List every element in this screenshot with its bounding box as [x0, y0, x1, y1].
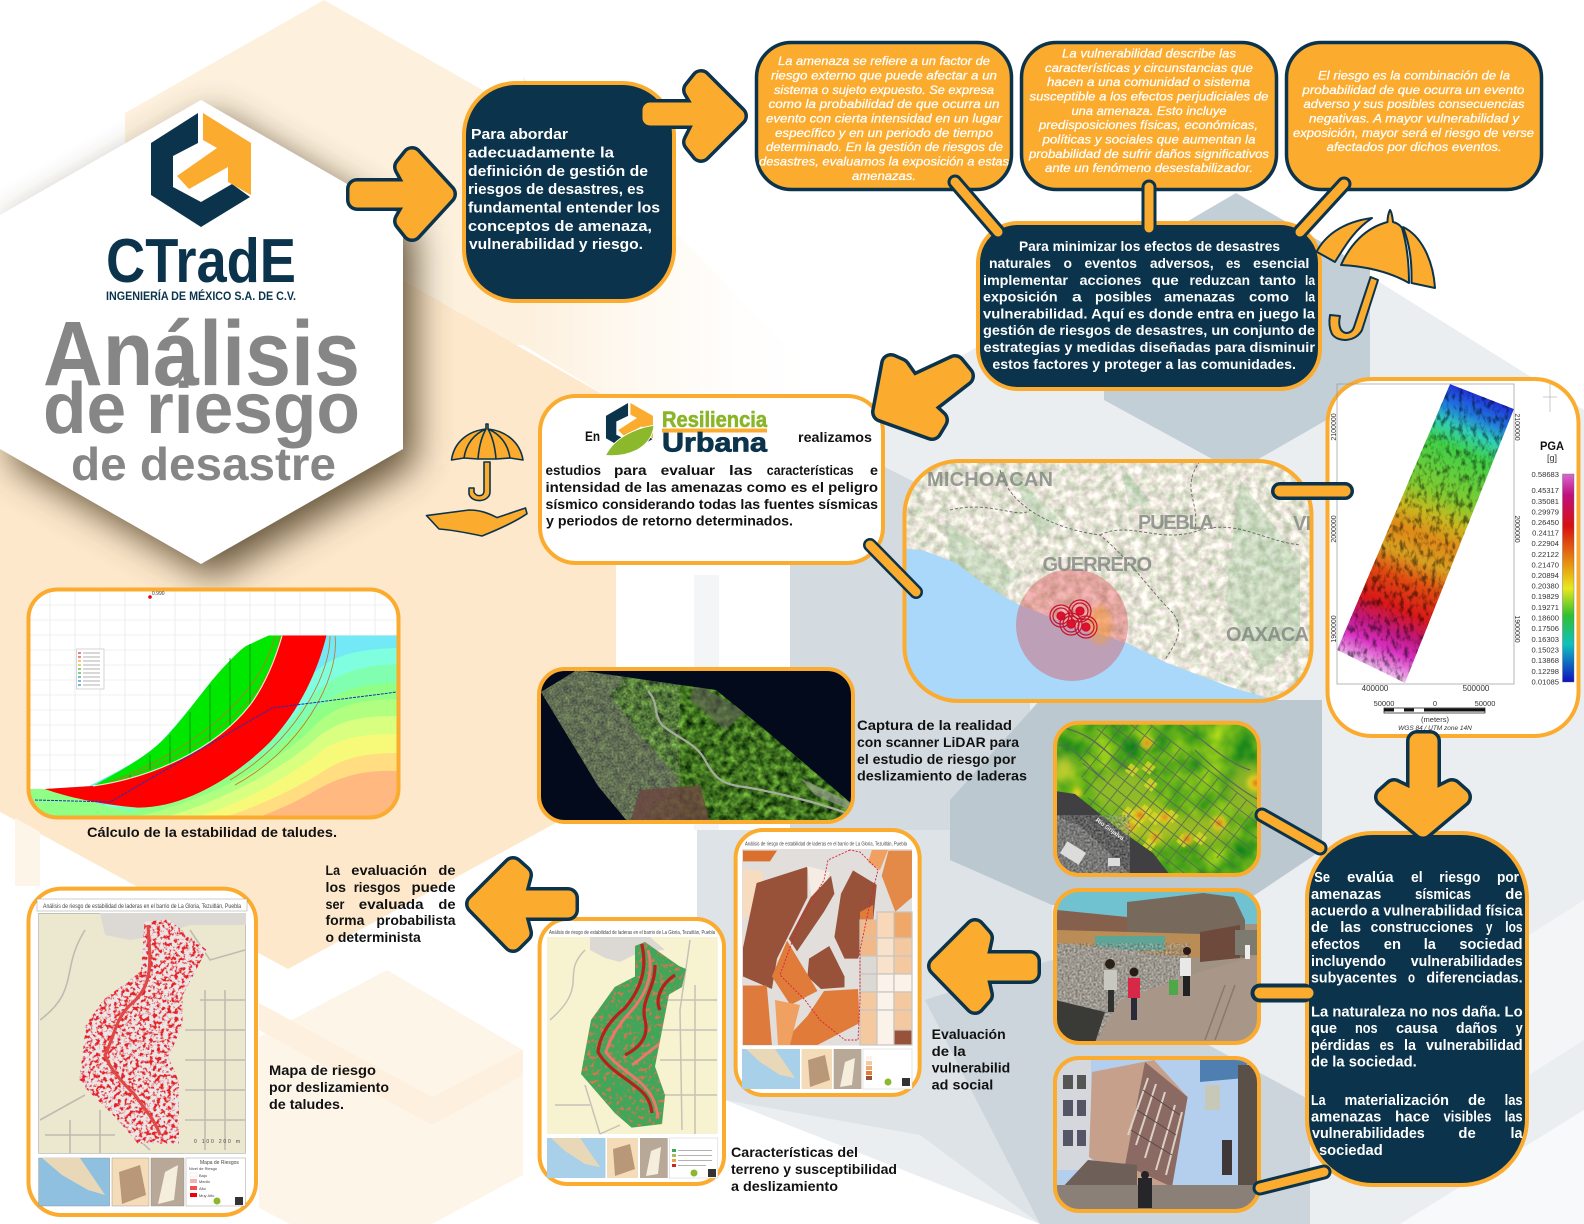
- map title: Análisis de riesgo de estabilidad de laderas en el barrio de La Gloria, Tezuitlán, Puebla: [745, 842, 907, 848]
- panel: gestión de riesgos: naturales: [989, 255, 1051, 271]
- minimaps: [547, 1138, 668, 1178]
- axis labels: 2100000: [1513, 413, 1520, 441]
- panel: vulnerabilidad: ante un fenómeno desestabilizador.: [1045, 161, 1253, 175]
- title: de riesgo: [43, 369, 360, 449]
- legend values: 0.26450: [1532, 518, 1559, 527]
- caption: Características: terreno y susceptibilidad: [731, 1161, 897, 1177]
- panel: evaluación física y social: la: [1424, 936, 1436, 953]
- logo wordmark: CTradE: [106, 227, 296, 296]
- panel: evaluación física y social: amenazas: [1311, 1108, 1381, 1126]
- connector: edificio a evaluación: [1260, 1172, 1324, 1188]
- text: evaluación de riesgos: puede: [412, 879, 456, 895]
- text: estudios: e: [870, 462, 878, 478]
- photo: edificio colapsado: [1055, 1058, 1259, 1211]
- panel: gestión de riesgos: la: [1305, 288, 1315, 304]
- arrow: introducción a conceptos: [650, 80, 737, 152]
- panel: mapa de riesgo: [28, 889, 256, 1215]
- panel: evaluación física y social: vulnerabilidades: [1312, 1125, 1425, 1142]
- panel: evaluación física y social: amenazas: [1311, 886, 1381, 903]
- chart frame: [1337, 384, 1514, 684]
- map title: Análisis de riesgo de estabilidad de laderas en el barrio de La Gloria, Tezuitlán, Puebla: [549, 930, 715, 936]
- caption: mapa de riesgo: de taludes.: [269, 1096, 344, 1112]
- legend values: 0.17506: [1532, 624, 1559, 633]
- map: state labels: PUEBLA: [1138, 512, 1214, 534]
- text: estudios: y periodos de retorno determinados.: [546, 512, 793, 528]
- white hexagon with shadow: [0, 100, 415, 578]
- photo: escombros: [1055, 890, 1259, 1043]
- caption: LiDAR: deslizamiento de laderas: [857, 768, 1027, 784]
- panel: gestión de riesgos: tanto: [1260, 272, 1296, 288]
- panel: vulnerabilidad: La vulnerabilidad describe las: [1062, 46, 1236, 60]
- caption: Características: [731, 1144, 897, 1194]
- marker: factor de seguridad: 0.990: [152, 591, 165, 597]
- photo: LiDAR: [539, 669, 853, 822]
- panel: gestión de riesgos: implementar: [983, 272, 1069, 288]
- map legend: Bajo: [199, 1173, 208, 1178]
- panel: introducción: definición de gestión de: [468, 163, 648, 180]
- caption: LiDAR: el estudio de riesgo por: [857, 751, 1017, 767]
- panel: evaluación física y social: vulnerabilidades: [1411, 953, 1523, 970]
- panel: introducción: [464, 83, 674, 301]
- panel: riesgo: afectados por dichos eventos.: [1327, 140, 1502, 154]
- map legend: Muy Alto: [199, 1193, 215, 1198]
- icon: umbrella over hand: [426, 424, 527, 536]
- panel: evaluación física y social: las: [1505, 1108, 1523, 1126]
- panel: vulnerabilidad social map: [736, 830, 920, 1095]
- panel: gestión de riesgos: que: [1152, 272, 1179, 288]
- panel: evaluación física y social: y: [1486, 919, 1493, 936]
- legend values: 0.20380: [1532, 582, 1559, 590]
- text: evaluación de riesgos: o determinista: [326, 929, 421, 945]
- panel: gestión de riesgos: exposición: [983, 288, 1058, 304]
- legend values: 0.45317: [1532, 486, 1559, 495]
- axis labels: 1900000: [1513, 615, 1520, 643]
- panel: introducción: Para abordar: [471, 126, 568, 143]
- panel: evaluación física y social: sociedad: [1459, 936, 1523, 953]
- panel: gestión de riesgos: es: [1226, 255, 1241, 271]
- text: evaluación de riesgos: forma: [326, 912, 365, 928]
- text: realizamos: realizamos: [798, 429, 872, 445]
- arrow: a Resiliencia Urbana: [882, 364, 964, 430]
- scale bar: WGS 84 / UTM zone 14N: [1398, 725, 1472, 732]
- legend values: 0.12298: [1532, 667, 1559, 676]
- map: state labels: OAXACA: [1226, 624, 1309, 646]
- text: estudios: [546, 462, 878, 528]
- map: land: [904, 461, 1311, 701]
- map: state labels: MICHOACAN: [927, 469, 1053, 491]
- panel: evaluación física y social: acuerdo a vulnerabilidad física: [1311, 902, 1523, 920]
- panel: gestión de riesgos: eventos: [1084, 255, 1137, 271]
- map legend: Alto: [199, 1186, 207, 1191]
- river and city: [1055, 791, 1170, 875]
- text: estudios: para: [614, 462, 647, 478]
- text: estudios: intensidad de las amenazas como es el peligro: [546, 479, 878, 495]
- panel: evaluación física y social: sísmicas: [1415, 886, 1471, 903]
- panel: evaluación física y social: de la sociedad.: [1311, 1054, 1417, 1070]
- panel: vulnerabilidad: características y circunstancias que: [1045, 61, 1253, 75]
- panel: amenaza: evento con cierta intensidad en un lugar: [766, 112, 1003, 126]
- panel: evaluación física y social: pérdidas: [1311, 1037, 1370, 1054]
- map: state labels: [927, 469, 1319, 646]
- legend values: 0.19829: [1532, 592, 1559, 601]
- logo subtitle: INGENIERÍA DE MÉXICO S.A. DE C.V.: [106, 290, 296, 303]
- panel: evaluación física y social: por: [1497, 869, 1519, 886]
- legend values: 0.22904: [1532, 539, 1559, 548]
- panel: susceptibilidad map: [540, 919, 724, 1184]
- marker: factor de seguridad: [148, 591, 165, 599]
- map: state labels: VE: [1293, 513, 1319, 535]
- legend values: 0.58683: [1532, 470, 1559, 479]
- panel: evaluación física y social: Se: [1314, 869, 1330, 886]
- panel: riesgo: El riesgo es la combinación de la: [1318, 68, 1510, 82]
- panel: gestión de riesgos: reduzcan: [1190, 272, 1250, 288]
- legend values: 0.21470: [1532, 560, 1559, 570]
- axis labels: 400000: [1362, 684, 1389, 693]
- scale bar: 0: [1433, 699, 1437, 708]
- map legend: [186, 1158, 246, 1206]
- map: impact circle: [1016, 569, 1128, 681]
- panel: vulnerabilidad: hacen a una comunidad o sistema: [1047, 75, 1250, 89]
- legend values: 0.19271: [1532, 603, 1559, 612]
- panel: amenaza: amenazas.: [852, 169, 916, 183]
- panel: evaluación física y social: riesgo: [1439, 869, 1480, 886]
- map legend: Mapa de Riesgos: [200, 1160, 239, 1166]
- panel: evaluación física y social: causa: [1396, 1020, 1438, 1037]
- connector: Resiliencia a mapa: [870, 545, 916, 592]
- legend values: 0.22122: [1532, 550, 1559, 559]
- legend colour bar: [1562, 474, 1574, 682]
- legend values: [1532, 470, 1559, 686]
- axis labels: 2000000: [1513, 515, 1520, 543]
- panel: gestión de riesgos: estos factores y proteger a las comunidades.: [992, 356, 1296, 372]
- axis labels: 1900000: [1331, 615, 1338, 643]
- panel: vulnerabilidad: susceptible a los efectos perjudiciales de: [1030, 90, 1269, 104]
- panel: riesgo: negativas. A mayor vulnerabilidad y: [1309, 112, 1520, 126]
- map: borders: [950, 461, 1300, 660]
- legend values: 0.29979: [1532, 508, 1559, 516]
- panel: riesgo: probabilidad de que ocurra un evento: [1301, 83, 1525, 97]
- panel: gestión de riesgos: Para minimizar los efectos de desastres: [1019, 238, 1280, 254]
- panel: gestión de riesgos: acciones: [1080, 272, 1142, 288]
- arrow: a evaluación de riesgos: [476, 867, 568, 942]
- logo wordmark Resiliencia Urbana: Urbana: [662, 428, 768, 458]
- caption: estabilidad: Cálculo de la estabilidad de taludes.: [87, 824, 337, 840]
- legend title: [g]: [1547, 453, 1557, 463]
- panel: amenaza: como la probabilidad de que ocurra un: [768, 97, 1000, 111]
- text: estudios: evaluar: [661, 462, 716, 478]
- panel: evaluación física y social: la: [1510, 1125, 1523, 1142]
- map: pendientes: [547, 937, 718, 1134]
- chart: PGA strip: [1337, 384, 1514, 684]
- panel: introducción: fundamental entender los: [468, 200, 660, 216]
- panel: evaluación física y social: las: [1340, 919, 1361, 936]
- logo wordmark Resiliencia Urbana: Resiliencia: [662, 407, 768, 432]
- axis labels: 500000: [1463, 684, 1490, 693]
- arrow: PGA a evaluación: [1385, 741, 1461, 829]
- panel: evaluación física y social: evalúa: [1347, 869, 1394, 886]
- text: estudios: sísmico considerando todas las fuentes sísmicas: [546, 496, 878, 512]
- text: estudios: características: [767, 462, 854, 478]
- caption: Evaluación: vulnerabilid: [932, 1060, 1010, 1076]
- caption: mapa de riesgo: [269, 1062, 389, 1112]
- caption: LiDAR: [857, 717, 1027, 784]
- panel: introducción: vulnerabilidad y riesgo.: [469, 236, 643, 253]
- scale bar: [1374, 699, 1495, 732]
- photo: mapa de calor: Río Grijalva: [1094, 818, 1125, 842]
- map: ocean: [906, 548, 1268, 699]
- roads: [1079, 724, 1257, 873]
- text: evaluación de riesgos: de: [438, 862, 456, 878]
- caption: LiDAR: Captura de la realidad: [857, 717, 1012, 733]
- panel: amenaza: sistema o sujeto expuesto. Se expresa: [774, 83, 994, 97]
- panel: evaluación física y social: la: [1404, 1037, 1417, 1054]
- panel: evaluación física y social: los: [1505, 919, 1523, 936]
- connector: mapa a PGA: [1280, 482, 1345, 500]
- caption: Evaluación: [932, 1026, 1010, 1092]
- title: [43, 303, 360, 490]
- text: En: En: [585, 428, 600, 444]
- panel: vulnerabilidad: [1022, 42, 1276, 190]
- panel: evaluación física y social: o: [1408, 970, 1415, 986]
- panel: evaluación física y social: y: [1516, 1020, 1523, 1037]
- panel: gestión de riesgos: estrategias y medidas diseñadas para disminuir: [984, 339, 1316, 355]
- minimaps: [39, 1158, 184, 1206]
- panel: gestión de riesgos: como: [1249, 288, 1289, 304]
- panel: vulnerabilidad: probabilidad de sufrir daños significativos: [1028, 147, 1269, 161]
- legend values: 0.24117: [1532, 528, 1559, 538]
- panel: evaluación física y social: subyacentes: [1311, 970, 1397, 986]
- panel: gestión de riesgos: [978, 223, 1320, 389]
- panel: evaluación física y social: en: [1384, 936, 1401, 953]
- panel: amenaza: La amenaza se refiere a un factor de: [778, 54, 990, 68]
- figures: [1104, 945, 1250, 1020]
- panel: amenaza: específico y en un periodo de tiempo: [775, 126, 993, 140]
- icon: logo Resiliencia: [606, 403, 654, 456]
- panel: amenaza: [756, 42, 1012, 190]
- title: Análisis: [43, 303, 360, 405]
- panel: evaluación física y social: de: [1468, 1092, 1486, 1109]
- text: evaluación de riesgos: probabilista: [376, 912, 456, 928]
- text: evaluación de riesgos: riesgos: [354, 879, 401, 895]
- panel: introducción: conceptos de amenaza,: [468, 218, 652, 235]
- north cross: [1543, 384, 1557, 412]
- scale bar: (meters): [1421, 715, 1449, 724]
- legend values: 0.16303: [1532, 635, 1559, 644]
- map: vulnerabilidad social: [742, 849, 912, 1046]
- caption: Características: Características del: [731, 1144, 858, 1160]
- legend values: 0.35081: [1532, 497, 1559, 506]
- logo CTradE: [106, 113, 296, 303]
- axis labels: [1331, 413, 1520, 693]
- map title: Análisis de riesgo de estabilidad de laderas en el barrio de La Gloria, Tezuitlán, Puebla: [43, 904, 242, 910]
- panel: evaluación física y social: materialización: [1344, 1092, 1449, 1109]
- panel: vulnerabilidad: predisposiciones físicas, económicas,: [1038, 118, 1258, 132]
- legend values: 0.01085: [1532, 678, 1559, 686]
- panel: evaluación física y social: de: [1458, 1125, 1476, 1142]
- chart legend: [76, 649, 104, 689]
- legend values: 0.18600: [1532, 614, 1559, 622]
- panel: introducción: riesgos de desastres, es: [468, 181, 644, 198]
- legend values: 0.13868: [1532, 656, 1559, 665]
- caption: Evaluación: de la: [932, 1043, 966, 1059]
- panel: gestión de riesgos: posibles: [1095, 288, 1152, 304]
- caption: LiDAR: con scanner LiDAR para: [857, 734, 1019, 750]
- panel: evaluación física y social: sociedad: [1319, 1142, 1383, 1159]
- minimaps: [742, 1049, 861, 1089]
- panel: gestión de riesgos: la: [1305, 272, 1315, 288]
- panel: amenaza: desastres, evaluamos la exposición a estas: [759, 154, 1009, 168]
- map: riesgo: [39, 913, 246, 1153]
- legend title: PGA: [1540, 441, 1564, 453]
- title: de desastre: [71, 438, 336, 490]
- connector: mapa de calor a evaluación: [1262, 815, 1320, 848]
- map legend: Medio: [199, 1179, 211, 1184]
- panel: introducción: adecuadamente la: [468, 144, 615, 162]
- legend values: 0.20894: [1532, 571, 1559, 580]
- panel: mapa PGA: [1328, 379, 1578, 736]
- map: epicentres: [1050, 600, 1097, 638]
- panel: evaluación física y social: efectos: [1311, 936, 1360, 953]
- icon: logo hexagon mark: [151, 113, 251, 227]
- connector: vulnerabilidad: [1142, 187, 1156, 228]
- scale bar: 50000: [1475, 699, 1495, 708]
- panel: evaluación física y social: La naturaleza no nos daña. Lo: [1311, 1004, 1523, 1020]
- panel: riesgo: exposición, mayor será el riesgo de verse: [1293, 126, 1534, 140]
- scale bar: 50000: [1374, 699, 1394, 708]
- photo: mapa de calor: [1053, 720, 1261, 877]
- map title: [37, 899, 247, 911]
- legend title: [1540, 441, 1564, 463]
- panel: evaluación física y social: de: [1311, 919, 1328, 936]
- panel: gestión de riesgos: gestión de riesgos de desastres, un conjunto de: [983, 322, 1315, 338]
- panel: evaluación física y social: hace: [1395, 1108, 1430, 1126]
- text: estudios: estudios: [546, 462, 601, 478]
- panel: vulnerabilidad: una amenaza. Esto incluye: [1072, 104, 1227, 118]
- panel: evaluación física y social: visibles: [1444, 1108, 1491, 1126]
- text: evaluación de riesgos: los: [326, 879, 346, 895]
- map: state labels: GUERRERO: [1042, 554, 1152, 576]
- axis labels: 2000000: [1331, 515, 1338, 543]
- panel: evaluación física y social: es: [1380, 1037, 1394, 1054]
- text: evaluación de riesgos: de: [438, 896, 456, 912]
- panel: evaluación física y social: el: [1411, 869, 1423, 886]
- text: evaluación de riesgos: La: [326, 862, 340, 878]
- panel: gestión de riesgos: vulnerabilidad. Aquí es donde entra en juego la: [983, 306, 1315, 322]
- panel: estabilidad de taludes: [28, 589, 400, 820]
- connector: amenaza: [955, 182, 998, 232]
- axis labels: 2100000: [1331, 413, 1338, 441]
- arrow: logo a introducción: [357, 157, 446, 231]
- map legend: [863, 1049, 912, 1089]
- caption: Evaluación: Evaluación: [932, 1026, 1006, 1042]
- yellow blocks: [1122, 761, 1207, 852]
- panel: riesgo: adverso y sus posibles consecuencias: [1304, 97, 1524, 111]
- icon: umbrella: [1317, 210, 1435, 340]
- text: evaluación de riesgos: ser: [326, 896, 345, 912]
- panel: evaluación física y social: daños: [1456, 1020, 1497, 1037]
- panel: evaluación física y social: incluyendo: [1311, 953, 1386, 970]
- panel: gestión de riesgos: a: [1072, 288, 1082, 304]
- panel: evaluación física y social: diferenciadas.: [1426, 970, 1523, 986]
- panel: evaluación física y social: que: [1311, 1020, 1337, 1037]
- legend values: 0.15023: [1532, 646, 1559, 654]
- panel: evaluación física y social: las: [1505, 1092, 1523, 1109]
- panel: gestión de riesgos: amenazas: [1164, 288, 1235, 304]
- panel: evaluación física y social: [1307, 833, 1527, 1185]
- panel: riesgo: [1286, 42, 1542, 190]
- panel: evaluación física y social: construcciones: [1371, 919, 1473, 936]
- panel: vulnerabilidad: políticas y sociales que aumentan la: [1041, 132, 1256, 146]
- text: evaluación de riesgos: [326, 862, 456, 945]
- scale: 0 100 200 m: [194, 1139, 240, 1145]
- panel: amenaza: riesgo externo que puede afectar a un: [771, 68, 997, 82]
- panel: mapa sísmico: [904, 461, 1319, 710]
- panel: evaluación física y social: de: [1505, 886, 1523, 903]
- caption: mapa de riesgo: Mapa de riesgo: [269, 1062, 376, 1078]
- text: evaluación de riesgos: evaluación: [351, 862, 427, 878]
- map legend: Nivel de Riesgo: [189, 1166, 218, 1171]
- map legend: [669, 1138, 718, 1178]
- panel: evaluación física y social: La: [1311, 1092, 1326, 1109]
- panel: evaluación física y social: nos: [1355, 1020, 1378, 1037]
- caption: Evaluación: ad social: [932, 1076, 993, 1092]
- arrow: vulnerabilidad social: [938, 929, 1030, 1004]
- text: estudios: las: [729, 462, 753, 478]
- caption: Características: a deslizamiento: [731, 1178, 838, 1194]
- caption: mapa de riesgo: por deslizamiento: [269, 1079, 389, 1095]
- panel: amenaza: determinado. En la gestión de riesgos de: [766, 140, 1003, 154]
- panel: gestión de riesgos: o: [1064, 255, 1072, 271]
- panel: Resiliencia Urbana: [540, 396, 883, 563]
- logo wordmark Resiliencia Urbana: [662, 407, 768, 458]
- text: evaluación de riesgos: evaluada: [359, 896, 424, 912]
- connector: riesgo: [1300, 184, 1344, 232]
- connector: escombros a evaluación: [1260, 984, 1308, 1002]
- panel: evaluación física y social: vulnerabilidad: [1426, 1037, 1523, 1054]
- panel: gestión de riesgos: esencial: [1253, 255, 1309, 271]
- panel: gestión de riesgos: adversos,: [1150, 255, 1214, 271]
